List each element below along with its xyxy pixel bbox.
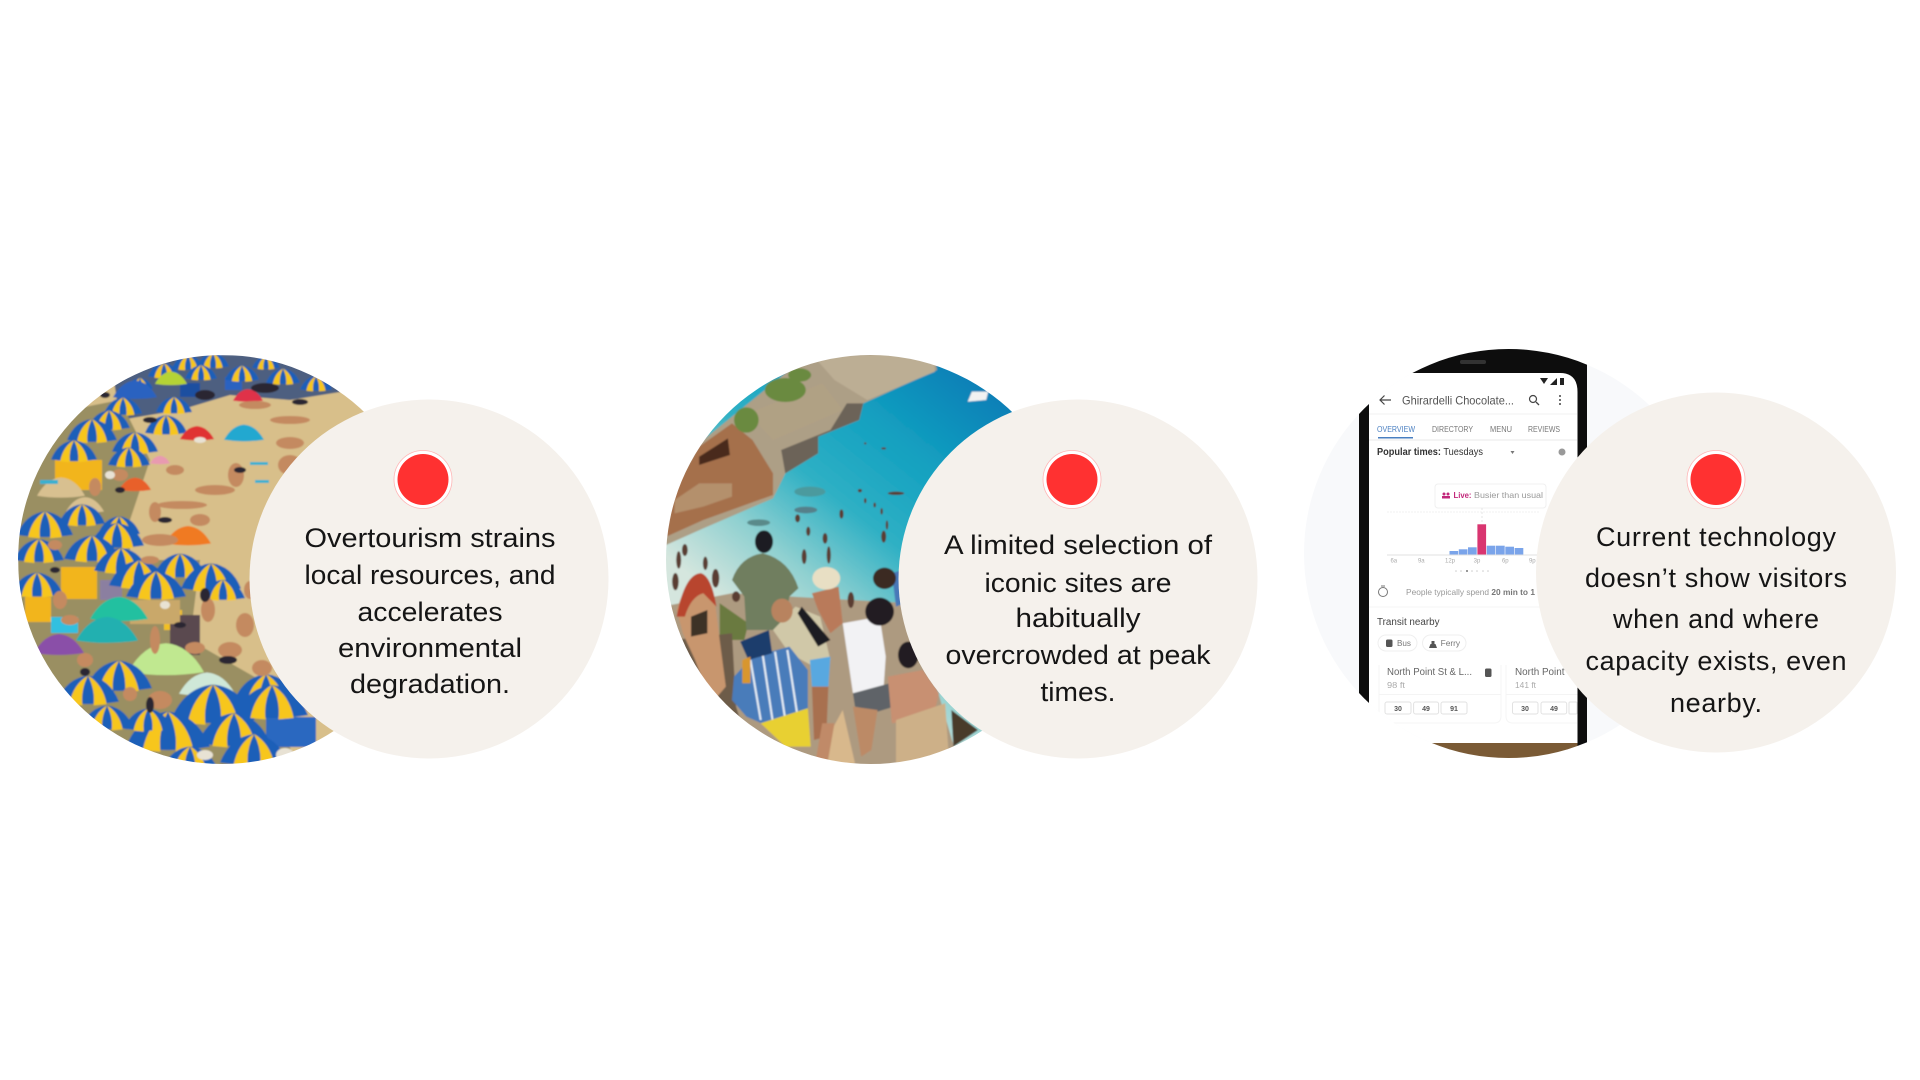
live callout: Busier than usual	[1474, 490, 1543, 500]
popular times bar chart: 12p	[1445, 558, 1456, 564]
infographic: three overtourism problem cards	[18, 349, 1896, 764]
popular times bar chart: 6a	[1390, 558, 1398, 564]
card 1 text: local resources, and	[304, 560, 556, 590]
card 1 text	[304, 523, 556, 699]
transit nearby: Transit nearby	[1377, 617, 1440, 628]
popular times bar chart: 9a	[1418, 558, 1425, 564]
red dot marker	[1687, 450, 1745, 508]
beige text circle	[1536, 392, 1896, 752]
swimmers	[672, 442, 904, 608]
transit nearby: Ferry	[1441, 639, 1460, 648]
card 2 text: A limited selection of	[944, 530, 1213, 560]
transit nearby: 98 ft	[1387, 680, 1406, 690]
popular times bar chart: 9p	[1529, 558, 1536, 564]
live callout	[1435, 484, 1546, 508]
card 3 text: when and where	[1612, 604, 1819, 634]
popular times heading: Popular times: Tuesdays	[1377, 446, 1483, 458]
card 1 text: Overtourism strains	[304, 523, 556, 553]
card 3 text: capacity exists, even	[1586, 646, 1846, 676]
visit duration row: People typically spend 20 min to 1	[1406, 587, 1535, 597]
live callout: Live:	[1454, 490, 1472, 500]
card 2 text: habitually	[1016, 603, 1141, 633]
transit nearby: 49	[1422, 706, 1430, 713]
tabs: REVIEWS	[1528, 425, 1560, 434]
popular times bar chart: 3p	[1474, 558, 1481, 564]
sunbathers and towels	[40, 383, 310, 762]
card 3 text	[1585, 522, 1847, 718]
card 2 text: iconic sites are	[984, 568, 1172, 598]
photo strip at bottom of screen	[1432, 743, 1578, 758]
card 1: overtourism strains resources	[11, 353, 609, 773]
popular times bar chart: 6p	[1502, 558, 1509, 564]
card 2 text: times.	[1040, 677, 1116, 707]
faint backing circle	[1304, 349, 1713, 758]
app bar: Ghirardelli Chocolate...	[1402, 394, 1514, 408]
card 3: current technology gap	[1359, 349, 1896, 758]
transit nearby	[1377, 617, 1578, 723]
app bar	[1369, 394, 1577, 414]
red dot marker	[394, 450, 452, 508]
transit nearby: North Point St & L...	[1387, 667, 1472, 678]
card 1 text: accelerates	[358, 597, 502, 627]
card 2 text	[944, 530, 1213, 707]
card 3 text: Current technology	[1596, 522, 1836, 552]
card 1 text: environmental	[338, 633, 522, 663]
foreground ground	[662, 593, 962, 773]
transit nearby: 91	[1450, 706, 1458, 713]
red dot marker	[1043, 450, 1101, 508]
card 3 text: nearby.	[1670, 688, 1762, 718]
transit nearby: North Point	[1515, 667, 1565, 678]
card 2 text: overcrowded at peak	[946, 640, 1211, 670]
tabs: DIRECTORY	[1432, 425, 1474, 434]
visit duration row	[1369, 586, 1540, 608]
photo: crowded turquoise cove	[666, 355, 1012, 764]
photo: crowded beach with umbrellas	[18, 355, 364, 764]
popular times bar chart	[1387, 508, 1540, 572]
card 2: iconic sites overcrowded	[650, 340, 1258, 773]
beige text circle	[898, 400, 1258, 758]
tabs	[1369, 425, 1577, 440]
card 3 text: doesn’t show visitors	[1585, 563, 1847, 593]
cliffs	[662, 350, 937, 547]
tabs: MENU	[1490, 425, 1512, 434]
umbrellas	[11, 353, 332, 773]
transit nearby: 49	[1550, 706, 1558, 713]
beige text circle	[250, 400, 608, 758]
transit nearby: Bus	[1397, 639, 1411, 648]
foreground visitors	[677, 530, 978, 770]
transit nearby: 30	[1394, 706, 1402, 713]
transit nearby: 141 ft	[1515, 680, 1537, 690]
card 1 text: degradation.	[350, 669, 510, 699]
popular times heading	[1378, 448, 1566, 457]
tabs: OVERVIEW	[1377, 425, 1415, 434]
status bar icons	[1540, 378, 1564, 385]
transit nearby: 30	[1521, 706, 1529, 713]
phone mockup showing map listing	[1359, 340, 1587, 773]
